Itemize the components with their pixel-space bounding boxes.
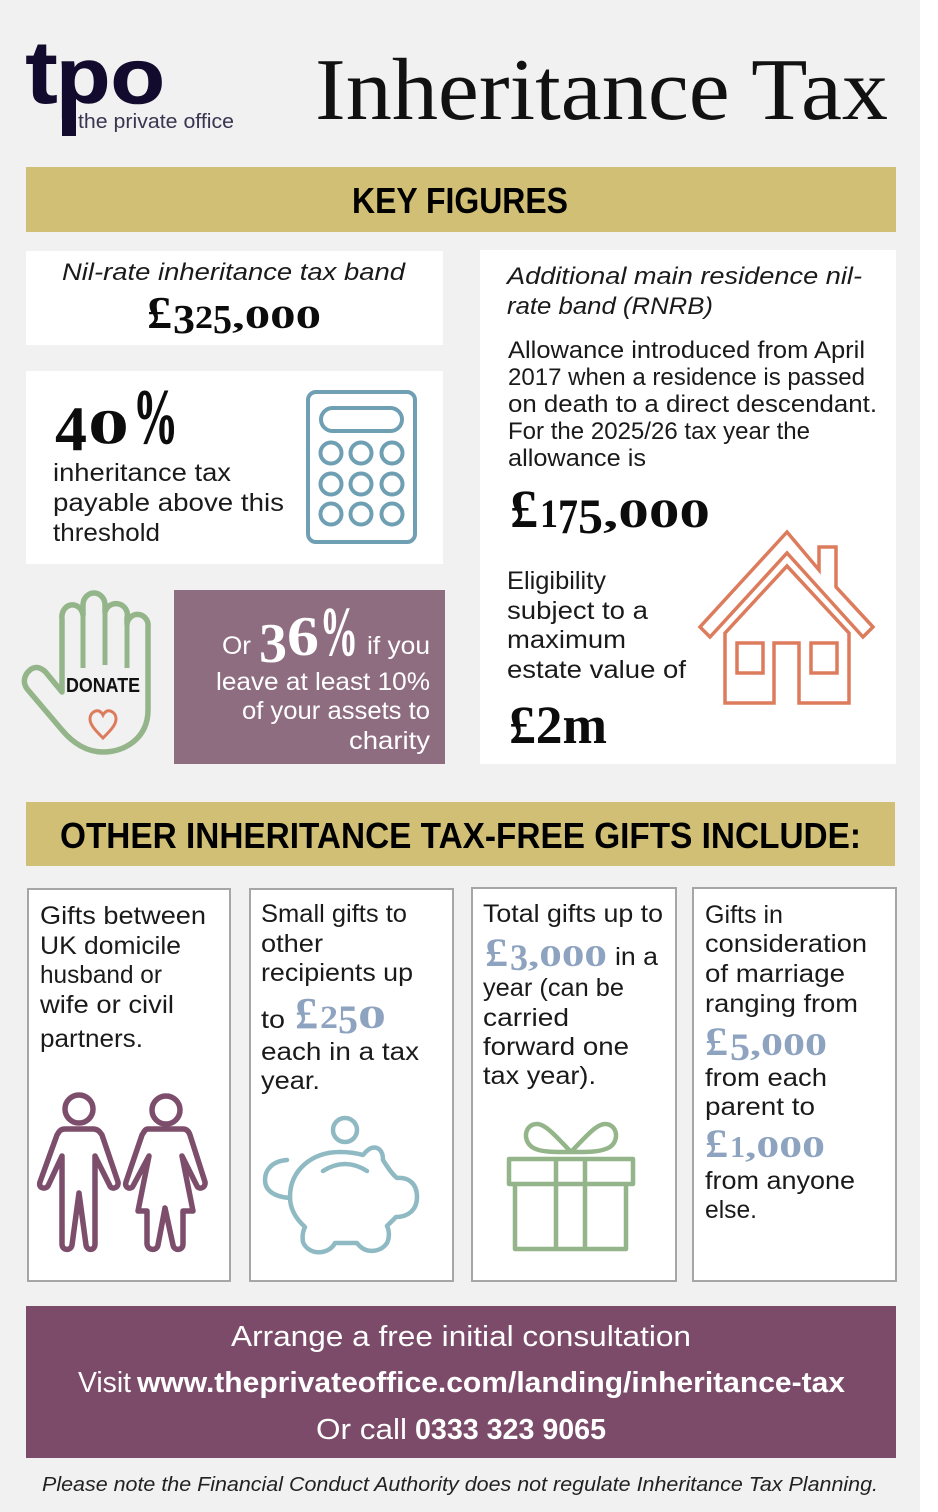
panel: residence nil-rate band: estate value of xyxy=(507,656,686,684)
panel: annual gifts: forward one xyxy=(483,1033,629,1061)
icon: calculator xyxy=(308,392,415,542)
panel: residence nil-rate band: 2017 when a residence is passed xyxy=(508,364,865,391)
panel: annual gifts: year (can be xyxy=(483,974,624,1002)
panel: marriage gifts xyxy=(693,888,896,1281)
figure: 325,000: 2 xyxy=(195,300,213,336)
panel: residence nil-rate band: Eligibility xyxy=(507,567,606,595)
panel: small gifts: recipients up xyxy=(261,959,413,987)
figure: 325,000: 3 xyxy=(173,296,195,342)
call to action: www.theprivateoffice.com/landing/inheritance-tax xyxy=(136,1367,845,1399)
panel: residence nil-rate band: Additional main residence nil- xyxy=(505,263,862,290)
panel: annual gifts: Total gifts up to xyxy=(483,900,663,928)
figure: 1,000: £ xyxy=(705,1121,728,1166)
panel: marriage gifts: parent to xyxy=(705,1093,815,1121)
figure: 5,000: ,000 xyxy=(750,1026,827,1062)
panel: small gifts: year. xyxy=(261,1067,320,1095)
title: Inheritance Tax xyxy=(315,42,888,139)
panel: annual gifts: in a xyxy=(615,943,658,971)
panel: annual gifts: carried xyxy=(483,1004,569,1032)
panel: small gifts: Small gifts to xyxy=(261,900,407,928)
panel: annual gifts: tax year). xyxy=(483,1062,596,1090)
figure: 250: 0 xyxy=(358,1000,386,1036)
icon: donate hand: DONATE xyxy=(66,675,140,697)
figure: 175,000: 5 xyxy=(578,488,603,544)
panel: spouse gifts: Gifts between xyxy=(40,902,206,930)
icon: gift box xyxy=(509,1124,633,1249)
panel: residence nil-rate band: on death to a direct descendant. xyxy=(508,391,877,418)
figure: 175,000: ,000 xyxy=(603,491,710,536)
heading band: key figures xyxy=(26,167,896,232)
figure: 325,000: 5 xyxy=(213,296,232,342)
panel: 36 percent charity: 6 xyxy=(287,606,319,668)
panel: spouse gifts: husband or xyxy=(40,961,162,989)
figure: 175,000: £ xyxy=(510,479,538,539)
figure: 175,000 xyxy=(510,479,710,544)
figure: 325,000: ,000 xyxy=(232,300,321,336)
panel: 40 percent: threshold xyxy=(53,519,160,547)
figure: 325,000: £ xyxy=(147,287,172,338)
figure: 40%: % xyxy=(133,373,178,460)
panel: nil-rate band xyxy=(26,251,443,345)
call to action xyxy=(26,1306,896,1458)
panel: marriage gifts: ranging from xyxy=(705,990,858,1018)
panel: marriage gifts: Gifts in xyxy=(705,901,783,929)
figure: 175,000: 7 xyxy=(558,488,578,544)
panel: nil-rate band: Nil-rate inheritance tax band xyxy=(62,259,406,286)
panel: 36 percent charity xyxy=(174,590,445,764)
figure: 250: 5 xyxy=(338,997,358,1042)
panel: residence nil-rate band: For the 2025/26 tax year the xyxy=(508,418,810,445)
heading band: other gifts: OTHER INHERITANCE TAX-FREE GIFTS INCLUDE: xyxy=(60,815,861,856)
figure: 1,000 xyxy=(705,1121,825,1166)
figure: 40% xyxy=(55,373,178,464)
figure: 3,000: £ xyxy=(485,930,508,975)
panel: residence nil-rate band xyxy=(480,250,896,764)
figure: 325,000 xyxy=(147,287,321,342)
panel: 36 percent charity: 3 xyxy=(259,613,287,675)
figure: 250: £ xyxy=(295,989,318,1038)
panel: residence nil-rate band: allowance is xyxy=(508,445,646,472)
figure: 3,000 xyxy=(485,930,607,979)
panel: marriage gifts: from anyone xyxy=(705,1167,855,1195)
icon: piggy bank xyxy=(265,1118,417,1252)
panel: 36 percent charity: charity xyxy=(349,727,431,755)
panel: marriage gifts: of marriage xyxy=(705,960,845,988)
figure: 5,000: 5 xyxy=(730,1026,750,1069)
icon: donate hand xyxy=(24,593,148,752)
panel: small gifts: other xyxy=(261,930,323,958)
logo: tpo the private office: po xyxy=(56,32,165,120)
panel: 40 percent xyxy=(26,371,443,564)
logo: tpo the private office: the private office xyxy=(78,111,234,133)
panel: small gifts xyxy=(250,889,453,1281)
figure: 1,000: 1 xyxy=(730,1129,745,1164)
panel: spouse gifts: wife or civil xyxy=(39,991,174,1019)
panel: small gifts: each in a tax xyxy=(261,1038,420,1066)
logo: tpo the private office xyxy=(25,23,234,136)
icon: couple xyxy=(40,1095,205,1249)
footnote: Please note the Financial Conduct Authority does not regulate Inheritance Tax Planning. xyxy=(42,1474,878,1496)
panel: annual gifts xyxy=(472,888,676,1281)
logo: tpo the private office: t xyxy=(25,23,58,123)
panel: residence nil-rate band: £2m xyxy=(509,695,607,755)
heading band: other gifts xyxy=(26,802,895,866)
panel: residence nil-rate band: Allowance introduced from April xyxy=(508,337,865,364)
call to action: Arrange a free initial consultation xyxy=(231,1321,691,1353)
panel: marriage gifts: consideration xyxy=(705,930,867,958)
panel: 36 percent charity: % xyxy=(320,594,358,671)
figure: 40%: 4 xyxy=(55,393,87,464)
figure: 5,000 xyxy=(705,1019,827,1069)
call to action: Or call xyxy=(316,1414,407,1446)
panel: 36 percent charity: Or xyxy=(222,632,251,660)
panel: spouse gifts: UK domicile xyxy=(40,932,181,960)
panel: 40 percent: inheritance tax xyxy=(53,459,232,487)
figure: 250: 2 xyxy=(320,1000,338,1036)
panel: spouse gifts: partners. xyxy=(40,1025,143,1053)
panel: marriage gifts: else. xyxy=(705,1196,757,1224)
figure: 5,000: £ xyxy=(705,1019,728,1064)
figure: 3,000: 3 xyxy=(510,938,528,979)
figure: 40%: 0 xyxy=(88,399,129,454)
panel: 36 percent charity: if you xyxy=(367,632,430,660)
panel: residence nil-rate band: rate band (RNRB) xyxy=(507,293,713,320)
panel: small gifts: to xyxy=(261,1006,285,1034)
panel: residence nil-rate band: subject to a xyxy=(507,597,648,625)
heading band: key figures: KEY FIGURES xyxy=(352,180,568,221)
icon: house xyxy=(700,532,873,703)
panel: 40 percent: payable above this xyxy=(53,489,284,517)
panel: marriage gifts: from each xyxy=(705,1064,827,1092)
panel: 36 percent charity: leave at least 10% xyxy=(216,668,430,696)
panel: 36 percent charity: of your assets to xyxy=(242,697,430,725)
figure: 175,000: 1 xyxy=(540,491,558,536)
panel: residence nil-rate band: maximum xyxy=(507,626,626,654)
panel: spouse gifts xyxy=(28,889,230,1281)
figure: 3,000: ,000 xyxy=(528,938,607,973)
call to action: Visit xyxy=(78,1367,131,1399)
call to action: 0333 323 9065 xyxy=(415,1414,606,1446)
figure: 1,000: ,000 xyxy=(745,1129,825,1164)
figure: 250 xyxy=(295,989,386,1042)
